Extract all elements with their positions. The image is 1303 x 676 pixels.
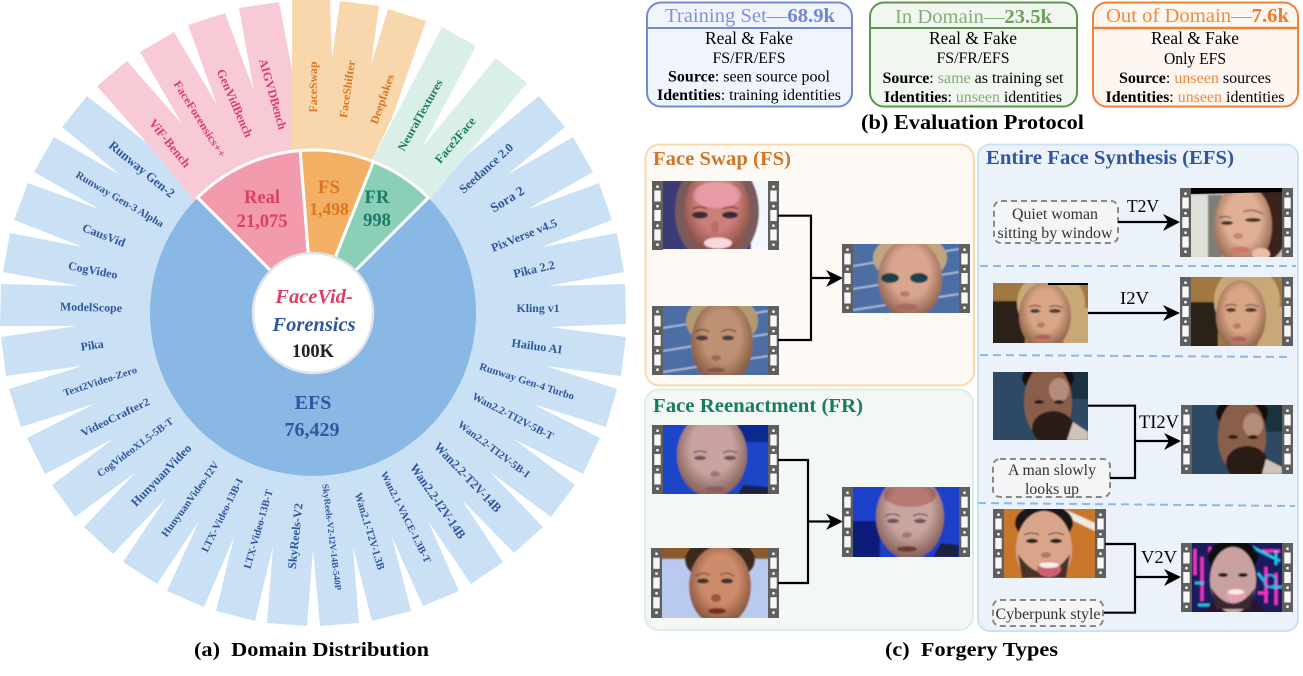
text block: FS/FR/EFS	[936, 50, 1010, 67]
I2V label: I2V	[1120, 288, 1149, 308]
T2V prompt	[994, 201, 1118, 243]
heading: Training Set—68.9k	[665, 5, 836, 27]
ring label: FS: FS	[318, 177, 340, 198]
panel: in domain	[870, 2, 1077, 106]
bar labels: face swap	[306, 60, 397, 126]
bar labels: face swap: Deepfakes	[369, 72, 397, 126]
I2V arrow	[1088, 305, 1180, 321]
I2V film	[1180, 266, 1293, 352]
text block: Source: unseen sources	[1119, 70, 1271, 87]
TI2V film	[1181, 397, 1293, 480]
bar labels: entire face synthesis: Wan2.2-TI2V-5B-I	[455, 419, 531, 481]
T2V prompt: sitting by window	[998, 225, 1113, 242]
heading: In Domain—23.5k	[895, 6, 1053, 28]
bar labels: face swap: FaceSwap	[306, 61, 320, 112]
ring label: Real: Real	[244, 188, 280, 208]
outer bars: FS sources	[292, 0, 426, 313]
heading: Face Reenactment (FR)	[653, 395, 863, 417]
V2V arrow	[1135, 569, 1181, 586]
panel: domain distribution radial chart	[0, 0, 626, 626]
source film	[652, 413, 779, 497]
ring label: Real	[237, 188, 287, 232]
text block: Only EFS	[1164, 49, 1226, 68]
connector	[778, 216, 835, 340]
heading: Out of Domain—7.6k	[1106, 5, 1290, 27]
bar labels: entire face synthesis: Pika	[80, 337, 104, 354]
panel: face reenactment	[645, 390, 973, 630]
bar labels: entire face synthesis: HunyuanVideo-I2V	[160, 460, 222, 539]
bar labels: entire face synthesis: Seedance 2.0	[456, 140, 516, 196]
bar labels: entire face synthesis: Runway Gen-3 Alpha	[74, 170, 166, 231]
outer bars: EFS sources	[0, 96, 626, 626]
ring label: FR	[363, 188, 391, 231]
bar labels: entire face synthesis: Hailuo AI	[511, 336, 564, 357]
ring label: EFS: EFS	[295, 392, 331, 414]
bar labels: entire face synthesis: Runway Gen-2	[106, 137, 178, 201]
result film	[842, 475, 970, 561]
caption (b): (b) Evaluation Protocol	[861, 110, 1084, 134]
panel: entire face synthesis	[978, 144, 1298, 631]
target film	[652, 295, 779, 385]
bar labels: entire face synthesis: SkyReels-V2-I2V-14B-540P	[320, 483, 343, 591]
V2V prompt: Cyberpunk style	[996, 606, 1100, 623]
bar labels: entire face synthesis: Wan2.1-VACE-1.3B-T	[378, 470, 432, 565]
bar labels: entire face synthesis: Wan2.1-T2V-1.3B	[352, 491, 387, 572]
result film	[842, 234, 970, 319]
bar labels: entire face synthesis	[60, 137, 575, 591]
TI2V label: TI2V	[1139, 413, 1180, 433]
text block: Real & Fake	[705, 28, 793, 48]
connector	[778, 460, 835, 583]
T2V film	[1180, 172, 1293, 268]
bar labels: real: GenVidBench	[214, 67, 256, 140]
ring label: FR: 998	[363, 211, 391, 231]
bar labels: entire face synthesis: LTX-Video-13B-I	[200, 477, 246, 554]
centre title: Forensics	[271, 314, 356, 336]
bar labels: entire face synthesis: PixVerse v4.5	[489, 216, 559, 255]
bar labels: entire face synthesis: ModelScope	[60, 299, 122, 315]
text block: Identities: training identities	[657, 87, 841, 104]
text block: FS/FR/EFS	[712, 50, 786, 67]
ring segment: FS	[300, 150, 374, 313]
bar labels: entire face synthesis: SkyReels-V2	[285, 502, 306, 570]
panel: face swap	[646, 144, 974, 386]
TI2V prompt: A man slowly	[1008, 462, 1096, 479]
TI2V prompt	[993, 459, 1110, 498]
text block: Source: same as training set	[882, 70, 1064, 87]
ring segment: FR	[313, 162, 428, 313]
text block: Real & Fake	[1151, 28, 1239, 48]
T2V arrow	[1118, 214, 1180, 231]
panel: out of domain	[1093, 2, 1298, 106]
panel: training set	[647, 2, 852, 106]
TI2V arrow	[1135, 433, 1181, 450]
caption (a): (a) Domain Distribution	[194, 639, 430, 661]
ring label: EFS: 76,429	[284, 419, 340, 441]
I2V source image	[993, 283, 1088, 343]
bar labels: real: ViF-Bench	[146, 116, 193, 170]
bar labels: real: FaceForensics++	[171, 79, 228, 160]
bar labels: entire face synthesis: Sora 2	[487, 183, 527, 215]
text block: Identities: unseen identities	[884, 89, 1062, 106]
bar labels: entire face synthesis: Wan2.2-I2V-14B	[407, 461, 469, 542]
text block	[882, 28, 1064, 106]
heading: Entire Face Synthesis (EFS)	[986, 147, 1234, 169]
bar labels: face swap: FaceShifter	[338, 60, 358, 119]
TI2V source image	[993, 372, 1088, 440]
ring label: FR: FR	[365, 188, 390, 208]
ring segment: EFS	[150, 198, 476, 476]
outer bars: FR sources	[313, 27, 527, 313]
bar labels: entire face synthesis: CogVideoX1.5-5B-T	[95, 416, 176, 480]
V2V connector	[1104, 544, 1135, 613]
centre title: 100K	[292, 342, 335, 362]
bar labels: entire face synthesis: HunyuanVideo	[128, 441, 194, 509]
T2V prompt: Quiet woman	[1012, 206, 1098, 223]
bar labels: face reenactment: NeuralTextures	[396, 77, 446, 153]
ring segment: Real	[198, 150, 313, 313]
text block	[657, 28, 841, 104]
bar labels: entire face synthesis: Text2Video-Zero	[62, 365, 139, 399]
TI2V connector	[1088, 406, 1135, 478]
V2V source film	[993, 504, 1106, 587]
centre title: FaceVid-	[274, 286, 353, 308]
caption (c): (c) Forgery Types	[885, 639, 1058, 661]
bar labels: entire face synthesis: Wan2.2-TI2V-5B-T	[470, 391, 556, 443]
bar labels: face reenactment: Face2Face	[432, 114, 479, 166]
bar labels: entire face synthesis: Kling v1	[517, 301, 560, 315]
centre circle	[253, 253, 373, 373]
text block: Source: seen source pool	[668, 68, 831, 86]
outer bars: Real sources	[97, 2, 313, 313]
V2V film	[1181, 540, 1293, 615]
bar labels: real	[146, 57, 290, 170]
bar labels: entire face synthesis: VideoCrafter2	[79, 396, 152, 440]
ring label: FS: 1,498	[309, 199, 349, 219]
bar labels: entire face synthesis: CogVideo	[67, 258, 119, 282]
V2V prompt	[993, 600, 1103, 626]
arrow head	[826, 514, 843, 530]
bar labels: entire face synthesis: Runway Gen-4 Turbo	[478, 362, 575, 403]
T2V label: T2V	[1127, 196, 1159, 216]
bar labels: real: AIGVDBench	[256, 57, 290, 131]
source film	[652, 157, 779, 265]
V2V label: V2V	[1141, 547, 1177, 567]
ring label: Real: 21,075	[237, 212, 287, 232]
centre title	[271, 286, 356, 362]
ring label: FS	[309, 177, 349, 219]
TI2V prompt: looks up	[1025, 481, 1079, 498]
text block: Identities: unseen identities	[1106, 89, 1284, 106]
text block: Real & Fake	[929, 28, 1017, 48]
bar labels: entire face synthesis: CausVid	[80, 221, 128, 250]
arrow head	[826, 270, 843, 287]
bar labels: face reenactment	[396, 77, 479, 166]
heading: Face Swap (FS)	[653, 148, 791, 170]
bar labels: entire face synthesis: Pika 2.2	[512, 258, 556, 281]
bar labels: entire face synthesis: Wan2.2-T2V-14B	[431, 440, 504, 515]
text block	[1106, 28, 1284, 106]
bar labels: entire face synthesis: LTX-Video-13B-T	[243, 488, 276, 570]
ring label: EFS	[284, 392, 340, 441]
driving film	[651, 538, 779, 626]
